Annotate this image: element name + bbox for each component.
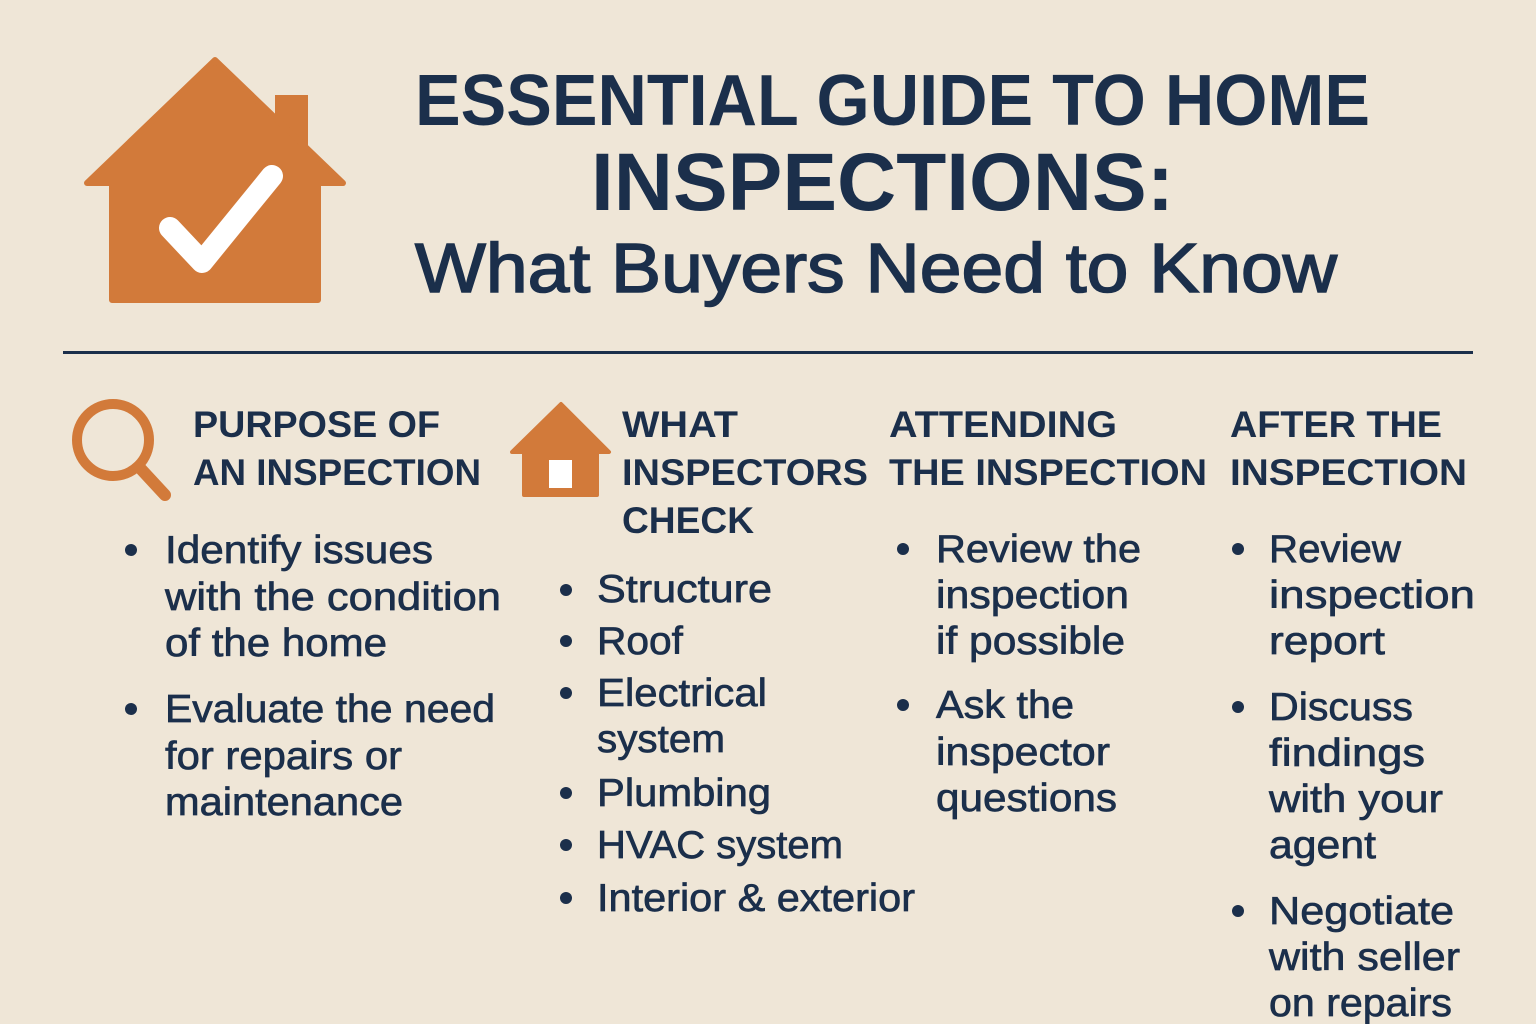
title <box>415 61 1370 307</box>
panel: after the inspection: Review <box>1269 528 1402 571</box>
title: ESSENTIAL GUIDE TO HOME <box>415 61 1370 141</box>
panel: attending the inspection: questions <box>936 777 1117 820</box>
panel: after the inspection: Negotiate <box>1269 890 1454 933</box>
panel: attending the inspection <box>889 404 1207 820</box>
panel: after the inspection: with seller <box>1268 936 1460 979</box>
panel: what inspectors check: Roof <box>597 620 683 663</box>
panel: attending the inspection: THE INSPECTION <box>889 452 1207 493</box>
icon: small house <box>512 404 609 495</box>
panel: after the inspection: inspection <box>1269 574 1475 617</box>
panel: after the inspection: with your <box>1268 778 1443 821</box>
panel: purpose of an inspection: PURPOSE OF <box>193 404 440 445</box>
panel: purpose of an inspection: with the condition <box>164 576 501 619</box>
panel: what inspectors check: Structure <box>597 568 772 611</box>
panel: attending the inspection: inspection <box>936 574 1129 617</box>
panel: purpose of an inspection: Evaluate the need <box>165 688 495 731</box>
panel: purpose of an inspection: Identify issues <box>165 529 433 572</box>
panel: what inspectors check: WHAT <box>622 404 738 445</box>
panel: after the inspection: on repairs <box>1269 982 1452 1024</box>
panel: what inspectors check: HVAC system <box>597 824 843 867</box>
panel: attending the inspection: ATTENDING <box>889 404 1117 445</box>
panel: attending the inspection: inspector <box>936 731 1110 774</box>
panel: purpose of an inspection: AN INSPECTION <box>193 452 481 493</box>
panel: attending the inspection: Review the <box>936 528 1141 571</box>
panel: purpose of an inspection <box>77 404 501 824</box>
title: INSPECTIONS: <box>591 137 1174 228</box>
panel: after the inspection: agent <box>1269 824 1376 867</box>
panel: purpose of an inspection: for repairs or <box>165 735 402 778</box>
panel: after the inspection: findings <box>1269 732 1425 775</box>
panel: purpose of an inspection: of the home <box>165 622 387 665</box>
icon: house with checkmark <box>87 60 343 300</box>
title: What Buyers Need to Know <box>415 229 1337 307</box>
panel: after the inspection: AFTER THE <box>1230 404 1442 445</box>
icon: magnifier <box>77 404 165 495</box>
panel: what inspectors check: system <box>597 718 725 761</box>
panel: after the inspection <box>1230 404 1475 1024</box>
panel: what inspectors check: Interior & exterior <box>597 877 915 920</box>
panel: after the inspection: INSPECTION <box>1230 452 1467 493</box>
panel: after the inspection: report <box>1269 620 1385 663</box>
panel: what inspectors check: Electrical <box>597 672 767 715</box>
panel: what inspectors check: INSPECTORS <box>622 452 868 493</box>
panel: after the inspection: Discuss <box>1269 686 1413 729</box>
panel: purpose of an inspection: maintenance <box>165 781 403 824</box>
panel: what inspectors check: CHECK <box>622 500 754 541</box>
panel: attending the inspection: if possible <box>936 620 1125 663</box>
panel: what inspectors check: Plumbing <box>597 772 771 815</box>
panel: what inspectors check <box>512 404 915 920</box>
panel: attending the inspection: Ask the <box>936 684 1074 727</box>
